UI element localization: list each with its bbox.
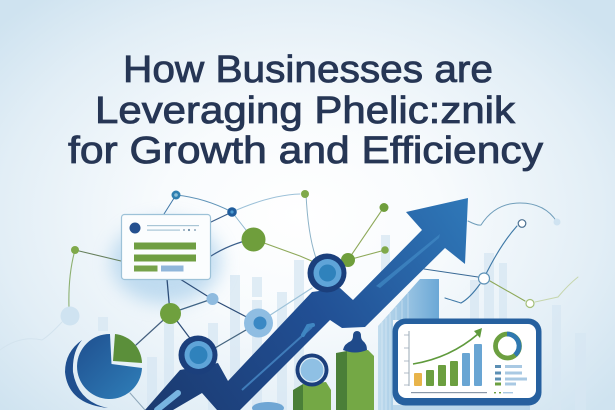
- card: dashboard widget: [122, 214, 210, 280]
- small blue blob: [252, 402, 284, 410]
- network connection lines: [0, 194, 578, 410]
- title: How Businesses are: [123, 49, 493, 91]
- title: [68, 49, 543, 172]
- building behind dashboard: [378, 279, 530, 410]
- green column with lens: [293, 354, 331, 410]
- growth arrow: [145, 198, 468, 410]
- title: Leveraging Phelic:znik: [95, 90, 516, 132]
- network nodes: [60, 190, 560, 338]
- faint background bar chart: [98, 235, 586, 410]
- green column with person: [336, 331, 374, 410]
- card shadow: [111, 220, 221, 304]
- donut chart: [496, 334, 520, 358]
- title: for Growth and Efficiency: [68, 130, 543, 172]
- arrow node: upper: [308, 254, 346, 292]
- dashboard panel: [392, 318, 542, 406]
- pie chart: [65, 334, 142, 408]
- legend: [494, 365, 527, 393]
- arrow node: lower: [178, 336, 218, 374]
- bar chart: [404, 328, 487, 393]
